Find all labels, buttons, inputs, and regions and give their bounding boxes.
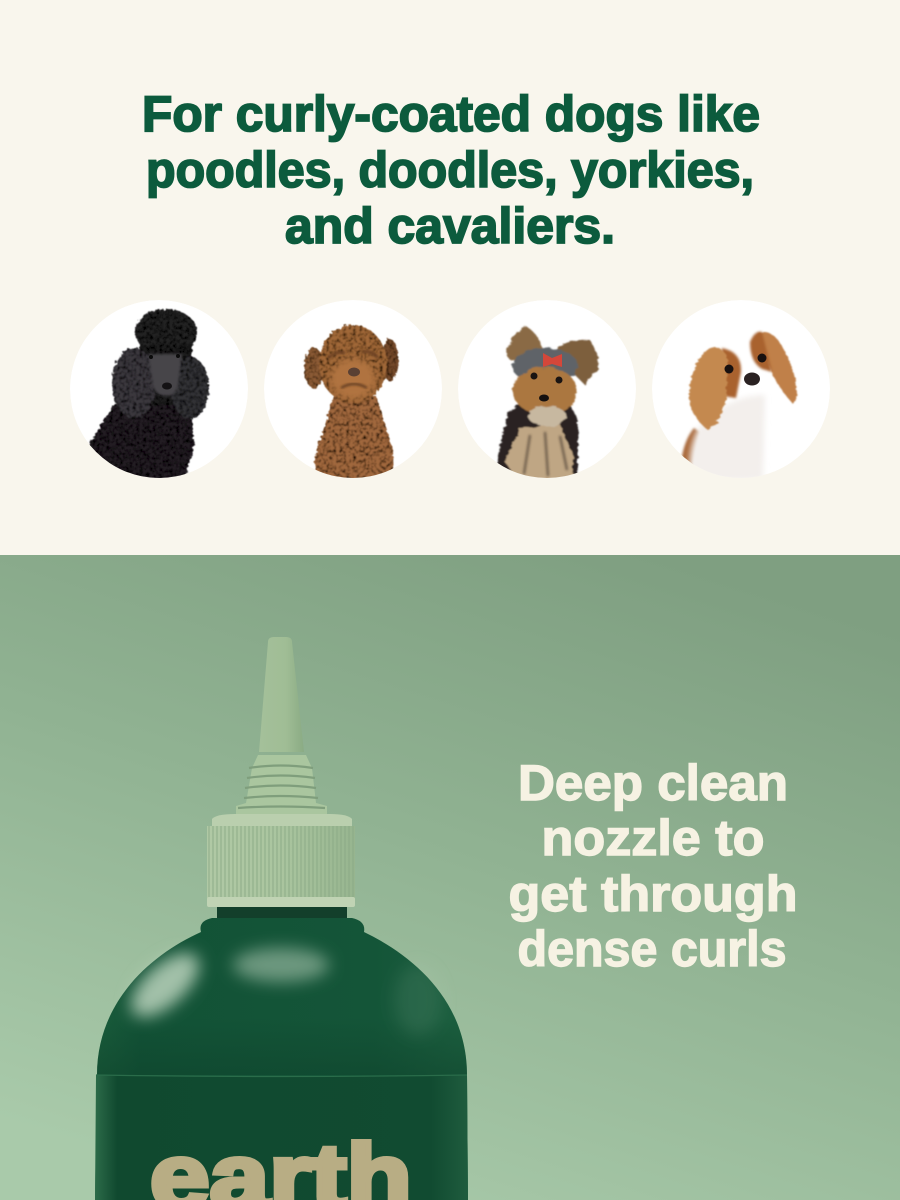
callout text: get through xyxy=(508,866,798,922)
callout text: dense curls xyxy=(518,921,786,977)
bottle neck xyxy=(217,904,347,924)
photo: yorkie xyxy=(458,300,636,480)
photo: brown doodle xyxy=(264,300,442,482)
heading: poodles, doodles, yorkies, xyxy=(146,142,754,198)
callout text: Deep clean xyxy=(518,755,788,811)
panel: nozzle xyxy=(0,555,900,1200)
nozzle tip xyxy=(259,637,304,752)
bottle label band xyxy=(95,1075,468,1200)
photo: cavalier xyxy=(652,300,830,482)
panel: breeds xyxy=(70,94,830,478)
photo: black poodle xyxy=(70,300,248,482)
callout text: nozzle to xyxy=(542,810,764,866)
callout text xyxy=(508,755,798,977)
bottle cap xyxy=(207,637,355,907)
product bottle xyxy=(95,637,468,1200)
heading xyxy=(142,86,760,254)
dome shading xyxy=(97,932,467,1075)
heading: For curly-coated dogs like xyxy=(142,86,760,142)
bottle highlights xyxy=(120,942,442,1036)
heading: and cavaliers. xyxy=(285,198,615,254)
bottle body xyxy=(95,918,468,1200)
